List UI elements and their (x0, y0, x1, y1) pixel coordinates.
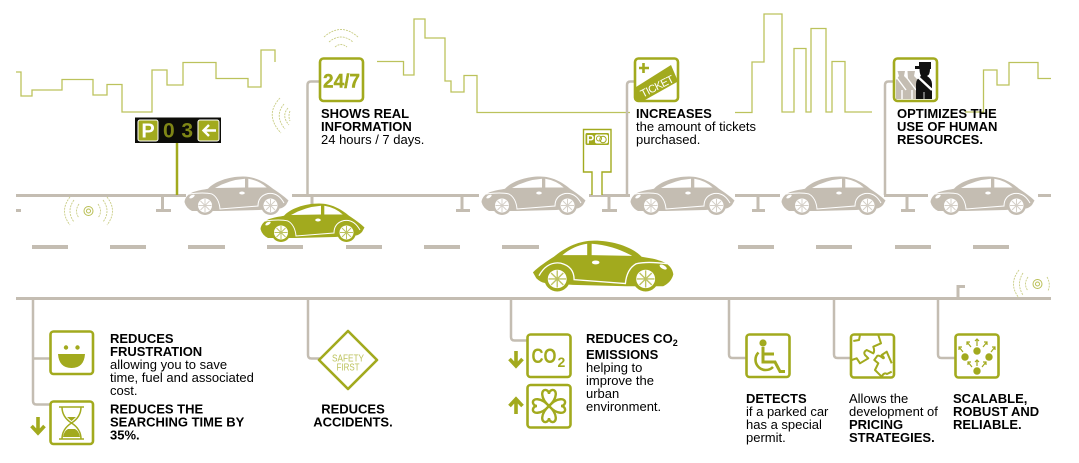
icon: clover (528, 385, 570, 428)
car: parked 5 (930, 176, 1034, 215)
car: green moving (260, 204, 364, 242)
parking meter (584, 130, 611, 195)
icon: down arrow (32, 417, 44, 433)
icon: clover up arrow (510, 399, 522, 414)
icon: 24/7 (320, 58, 363, 101)
text: reduces CO2 emissions: REDUCES CO (586, 331, 673, 346)
sign: P tile: P (141, 120, 155, 142)
car: parked 3 (630, 176, 734, 215)
text: shows real information: SHOWS REAL (321, 106, 409, 121)
text: optimizes human resources: OPTIMIZES THE (897, 106, 997, 121)
text: optimizes human resources: RESOURCES. (897, 132, 983, 147)
text: reduces CO2 emissions: 2 (673, 338, 678, 348)
text: reduces searching time: REDUCES THE (110, 402, 204, 416)
text: pricing strategies: Allows the (849, 391, 908, 406)
kerb posts (16, 195, 915, 210)
skyline: centre (377, 19, 630, 112)
text: increases tickets: purchased. (636, 132, 700, 147)
icon: ticket: TICKET (639, 73, 676, 100)
text: reduces frustration: allowing you to save (110, 357, 227, 372)
icon: smile (50, 332, 93, 374)
text: pricing strategies: PRICING (849, 417, 903, 432)
text: reduces accidents: REDUCES (321, 402, 385, 416)
text: optimizes human resources: USE OF HUMAN (897, 119, 997, 134)
text: reduces CO2 emissions: helping to (586, 360, 642, 375)
icon: safety first (319, 331, 377, 389)
text: detects permit: has a special (746, 417, 822, 432)
icon: safety first: FIRST (336, 362, 360, 374)
sign: free spaces count: 03 (163, 120, 193, 142)
icon: scalable network (956, 334, 998, 378)
icon: CO2 down arrow (510, 351, 522, 366)
sign: arrow tile (198, 120, 219, 141)
icon: hourglass (50, 402, 93, 444)
icon: staff (894, 58, 937, 101)
text: pricing strategies: development of (849, 404, 938, 419)
wifi signal: road right (1014, 270, 1049, 298)
connector: pricing (834, 298, 851, 358)
text: reduces frustration: cost. (110, 383, 137, 398)
connector: permits (729, 298, 747, 358)
connector: tickets (627, 82, 635, 195)
connector: human resources (885, 82, 894, 195)
text: reduces CO2 emissions: EMISSIONS (586, 347, 659, 362)
lane dashes (32, 245, 1009, 249)
car: parked 4 (782, 176, 886, 215)
text: increases tickets: the amount of tickets (636, 119, 756, 134)
text: reduces frustration: REDUCES (110, 331, 174, 346)
icon: CO2: 2 (558, 354, 566, 370)
icon: 24/7: 24/7 (323, 72, 360, 92)
text: detects permit: permit. (746, 430, 786, 445)
parking meter: P (586, 134, 594, 146)
text: detects permit: if a parked car (746, 404, 829, 419)
text: reduces frustration: FRUSTRATION (110, 344, 202, 359)
connector: real information (308, 82, 320, 195)
text: reduces CO2 emissions: urban (586, 386, 619, 401)
connector: scalable (938, 298, 956, 358)
text: reduces CO2 emissions: environment. (586, 399, 661, 414)
connector: accidents (308, 298, 320, 358)
wifi signal: road left (64, 197, 112, 225)
upper kerb line (16, 194, 1051, 197)
lower road line (16, 286, 1051, 298)
text: scalable robust reliable: SCALABLE, (953, 391, 1027, 406)
text: reduces CO2 emissions: improve the (586, 373, 654, 388)
parking sign pole (176, 143, 178, 195)
icon: wheelchair (746, 334, 790, 377)
text: reduces accidents: ACCIDENTS. (313, 414, 393, 430)
text: reduces searching time: SEARCHING TIME BY (110, 414, 245, 430)
parking display sign (135, 118, 221, 143)
text: shows real information: INFORMATION (321, 119, 412, 134)
text: increases tickets: INCREASES (636, 106, 712, 121)
icon: puzzle (851, 334, 894, 378)
text: detects permit: DETECTS (746, 391, 807, 406)
text: pricing strategies: STRATEGIES. (849, 430, 935, 445)
connector: emissions (511, 298, 528, 340)
text: reduces searching time: 35%. (110, 428, 140, 442)
icon: safety first: SAFETY (332, 352, 364, 364)
icon: ticket (635, 58, 678, 101)
skyline: right (965, 62, 1051, 112)
icon: CO2 (528, 334, 570, 377)
connector: frustration and time (33, 298, 51, 404)
icon: CO2: CO (532, 345, 556, 368)
skyline: left (16, 50, 275, 112)
text: scalable robust reliable: ROBUST AND (953, 404, 1039, 419)
text: scalable robust reliable: RELIABLE. (953, 417, 1022, 432)
wifi signal: side (272, 98, 290, 133)
skyline: towers (735, 14, 872, 112)
text: shows real information: 24 hours / 7 days. (321, 132, 424, 147)
wifi signal: top (324, 30, 358, 47)
car: large green (533, 241, 673, 291)
text: reduces frustration: time, fuel and associated (110, 370, 254, 385)
car: parked 1 (184, 176, 288, 215)
car: parked 2 (482, 176, 586, 215)
